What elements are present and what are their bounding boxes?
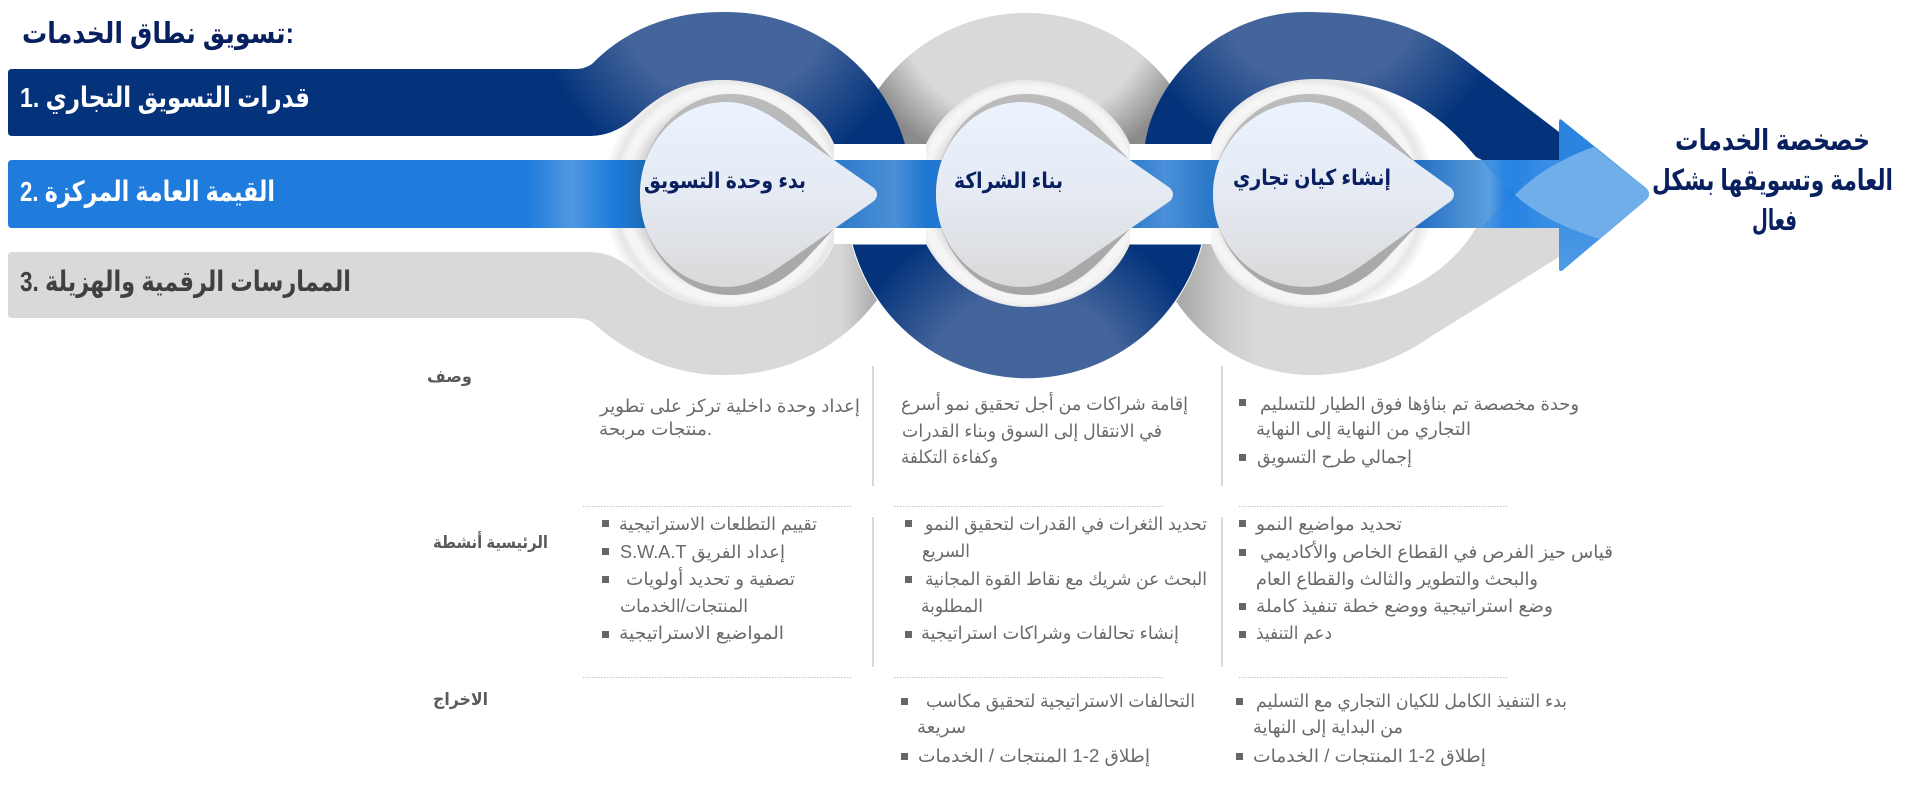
ribbon arc: gray bottom of third circle (1150, 228, 1559, 375)
droplet three with shadow (1213, 94, 1454, 295)
outcome heading (1652, 125, 1893, 237)
column one: activities bullets: تقييم التطلعات الاستراتيجية (619, 514, 817, 535)
column one: description text: منتجات مربحة. (599, 419, 712, 440)
row label: key activities: الرئيسية أنشطة (433, 531, 548, 553)
column two: output bullets: التحالفات الاستراتيجية لتحقيق مكاسب (926, 691, 1195, 712)
halo: second circle (926, 80, 1130, 307)
droplet label: create commercial entity: إنشاء كيان تجاري (1233, 165, 1391, 191)
ribbon arc: gray top of second circle (852, 13, 1200, 144)
column three: activities bullets: قياس حيز الفرص في القطاع الخاص والأكاديمي (1260, 541, 1613, 563)
ribbon arc: blue top of third circle (1145, 12, 1559, 160)
column three: output bullets: من البداية إلى النهاية (1253, 717, 1403, 738)
column two: activities bullets (905, 514, 1207, 644)
column three: activities bullets: تحديد مواضيع النمو (1255, 514, 1402, 535)
column one: description text (599, 396, 860, 440)
column two: output bullets (901, 691, 1195, 766)
bar label 1: 1. قدرات التسويق التجاري (20, 82, 310, 114)
column two: activities bullets: تحديد الثغرات في القدرات لتحقيق النمو (924, 514, 1207, 535)
column one: activities bullets: المواضيع الاستراتيجية (619, 623, 784, 644)
outcome heading: خصخصة الخدمات (1675, 125, 1870, 157)
column three: output bullets (1236, 691, 1567, 766)
column two: description text: إقامة شراكات من أجل تحقيق نمو أسرع (901, 392, 1188, 415)
column three: activities bullets: والبحث والتطوير والثالث والقطاع العام (1256, 569, 1538, 590)
row label: output: الاخراج (433, 690, 488, 710)
column two: activities bullets: السريع (922, 541, 970, 562)
white band between circles (834, 144, 1214, 244)
column two: description text (901, 392, 1188, 468)
column three: description bullets: وحدة مخصصة تم بناؤها فوق الطيار للتسليم (1260, 394, 1579, 415)
column one: description text: إعداد وحدة داخلية تركز على تطوير (599, 396, 860, 417)
halo: third circle (1211, 79, 1482, 308)
bar label 3: 3. الممارسات الرقمية والهزيلة (20, 266, 351, 298)
column two: description text: وكفاءة التكلفة (901, 447, 998, 468)
droplet one with shadow (640, 94, 877, 295)
outcome heading: فعال (1752, 205, 1797, 237)
ribbon: digital and lean practices (gray) (8, 244, 905, 375)
column two: output bullets: سريعة (917, 717, 966, 738)
row label: description: وصف (427, 367, 472, 387)
droplet two with shadow (936, 94, 1173, 295)
column three: description bullets: التجاري من النهاية إلى النهاية (1256, 419, 1471, 440)
droplet label: build partnership: بناء الشراكة (954, 168, 1063, 194)
central public value strip (bright blue) (8, 160, 1559, 228)
column three: activities bullets (1239, 514, 1613, 644)
column two: activities bullets: إنشاء تحالفات وشراكات استراتيجية (921, 623, 1179, 644)
column two: output bullets: إطلاق 2-1 المنتجات / الخدمات (918, 746, 1150, 766)
column three: description bullets (1239, 394, 1579, 468)
column three: activities bullets: دعم التنفيذ (1256, 623, 1332, 644)
column three: description bullets: إجمالي طرح التسويق (1257, 447, 1412, 468)
column three: output bullets: بدء التنفيذ الكامل للكيان التجاري مع التسليم (1256, 691, 1567, 712)
bar label 2: 2. القيمة العامة المركزة (20, 176, 275, 208)
droplet label: start marketing unit: بدء وحدة التسويق (644, 168, 806, 194)
halo: first circle (590, 80, 834, 307)
column one: activities bullets (602, 514, 817, 644)
column two: activities bullets: البحث عن شريك مع نقاط القوة المجانية (925, 569, 1207, 590)
column two: activities bullets: المطلوبة (921, 596, 983, 617)
column one: activities bullets: تصفية و تحديد أولويات (626, 567, 795, 590)
column two: description text: في الانتقال إلى السوق وبناء القدرات (902, 421, 1162, 442)
arrow head (1482, 119, 1649, 271)
column one: activities bullets: المنتجات/الخدمات (620, 596, 748, 616)
column three: output bullets: إطلاق 2-1 المنتجات / الخدمات (1253, 746, 1486, 766)
ribbon: commercial marketing capabilities (dark blue) (8, 12, 905, 144)
column one: activities bullets: إعداد الفريق S.W.A.T (620, 542, 785, 563)
column three: activities bullets: وضع استراتيجية ووضع خطة تنفيذ كاملة (1256, 596, 1553, 617)
title: تسويق نطاق الخدمات: (22, 18, 294, 50)
ribbon arc: blue bottom of second circle (852, 244, 1202, 379)
